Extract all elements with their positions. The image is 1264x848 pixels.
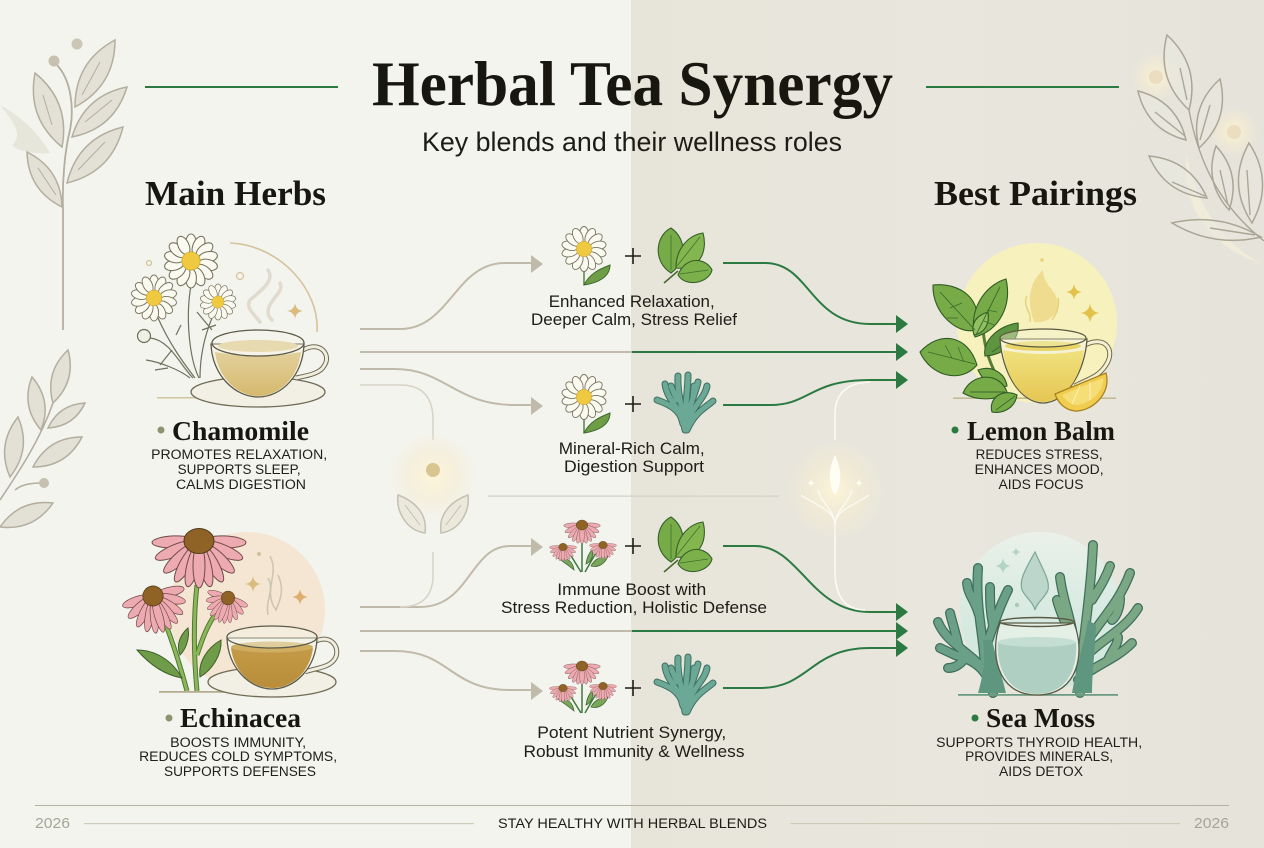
connector arrows — [360, 255, 908, 700]
description: sea moss: AIDS DETOX — [999, 764, 1083, 779]
icon: sea moss — [657, 375, 713, 430]
illustration: sea moss tonic — [938, 532, 1138, 696]
panel: pairing chamomile and sea moss — [559, 374, 713, 476]
heading: main herbs: Main Herbs — [145, 174, 326, 213]
panel: pairing chamomile and lemon balm — [531, 226, 737, 329]
icon: left sprout with glow — [389, 432, 477, 533]
description: chamomile: SUPPORTS SLEEP, — [178, 462, 301, 477]
illustration: echinacea tea — [119, 528, 337, 697]
footer: tagline: STAY HEALTHY WITH HERBAL BLENDS — [498, 816, 767, 831]
description: echinacea: REDUCES COLD SYMPTOMS, — [139, 749, 337, 764]
icon: sea moss — [657, 657, 713, 712]
text: pairing effect: Deeper Calm, Stress Relief — [531, 311, 737, 329]
name: sea moss: Sea Moss — [986, 703, 1095, 733]
bullet: chamomile — [158, 426, 164, 434]
arrows: pairings to lemon balm — [632, 263, 908, 440]
panel: chamomile — [131, 234, 331, 492]
arrows: pairings to sea moss — [632, 535, 908, 688]
text: pairing effect: Digestion Support — [564, 458, 704, 476]
icon: plus — [625, 538, 641, 554]
footer: year right: 2026 — [1194, 815, 1229, 832]
illustration: chamomile tea — [131, 234, 327, 407]
description: echinacea: BOOSTS IMMUNITY, — [170, 735, 306, 750]
arrows: echinacea to pairings — [360, 538, 632, 700]
subtitle: Key blends and their wellness roles — [422, 127, 842, 157]
bullet: lemon balm — [952, 426, 958, 434]
icon: plus — [625, 248, 641, 264]
description: chamomile: CALMS DIGESTION — [176, 477, 306, 492]
icon: daisy — [561, 374, 610, 433]
description: sea moss: SUPPORTS THYROID HEALTH, — [936, 735, 1142, 750]
panel: lemon balm — [920, 243, 1117, 492]
decorative sprig: top left — [0, 38, 127, 330]
description: lemon balm: ENHANCES MOOD, — [975, 462, 1104, 477]
text: pairing effect: Immune Boost with — [557, 581, 706, 599]
centre divider — [488, 496, 779, 497]
name: chamomile: Chamomile — [172, 416, 309, 446]
decorative sprig: lower left — [0, 350, 85, 528]
text: pairing effect: Potent Nutrient Synergy, — [537, 724, 726, 742]
panel: sea moss — [936, 532, 1146, 779]
text: pairing effect: Enhanced Relaxation, — [549, 293, 715, 311]
footer — [35, 805, 1229, 832]
description: lemon balm: AIDS FOCUS — [998, 477, 1084, 492]
description: echinacea: SUPPORTS DEFENSES — [164, 764, 316, 779]
heading: best pairings: Best Pairings — [934, 174, 1137, 213]
panel: echinacea — [119, 528, 341, 779]
illustration: lemon balm tea — [920, 243, 1117, 412]
description: sea moss: PROVIDES MINERALS, — [965, 749, 1113, 764]
icon: echinacea — [549, 661, 617, 713]
icon: lemon balm leaves — [658, 517, 712, 572]
icon: lemon balm leaves — [658, 228, 712, 283]
bullet: echinacea — [166, 714, 172, 722]
icon: plus — [625, 396, 641, 412]
icon: right glowing sprout — [787, 442, 883, 540]
text: pairing effect: Stress Reduction, Holistic Defense — [501, 599, 767, 617]
description: lemon balm: REDUCES STRESS, — [976, 447, 1103, 462]
icon: daisy — [561, 226, 610, 285]
panel: pairing echinacea and sea moss — [524, 657, 744, 761]
panel: pairing echinacea and lemon balm — [501, 517, 767, 617]
title rule: right — [926, 86, 1119, 88]
icon: plus — [625, 680, 641, 696]
title rule: left — [145, 86, 338, 88]
bullet: sea moss — [972, 714, 978, 722]
footer: year left: 2026 — [35, 815, 70, 832]
title: Herbal Tea Synergy — [372, 48, 893, 119]
name: echinacea: Echinacea — [180, 703, 302, 733]
text: pairing effect: Robust Immunity & Wellness — [524, 743, 744, 761]
text: pairing effect: Mineral-Rich Calm, — [559, 440, 705, 458]
icon: echinacea — [549, 520, 617, 572]
decorative sprig: top right — [1132, 35, 1264, 264]
name: lemon balm: Lemon Balm — [967, 416, 1115, 446]
arrows: chamomile to pairings — [360, 255, 632, 440]
description: chamomile: PROMOTES RELAXATION, — [151, 447, 327, 462]
